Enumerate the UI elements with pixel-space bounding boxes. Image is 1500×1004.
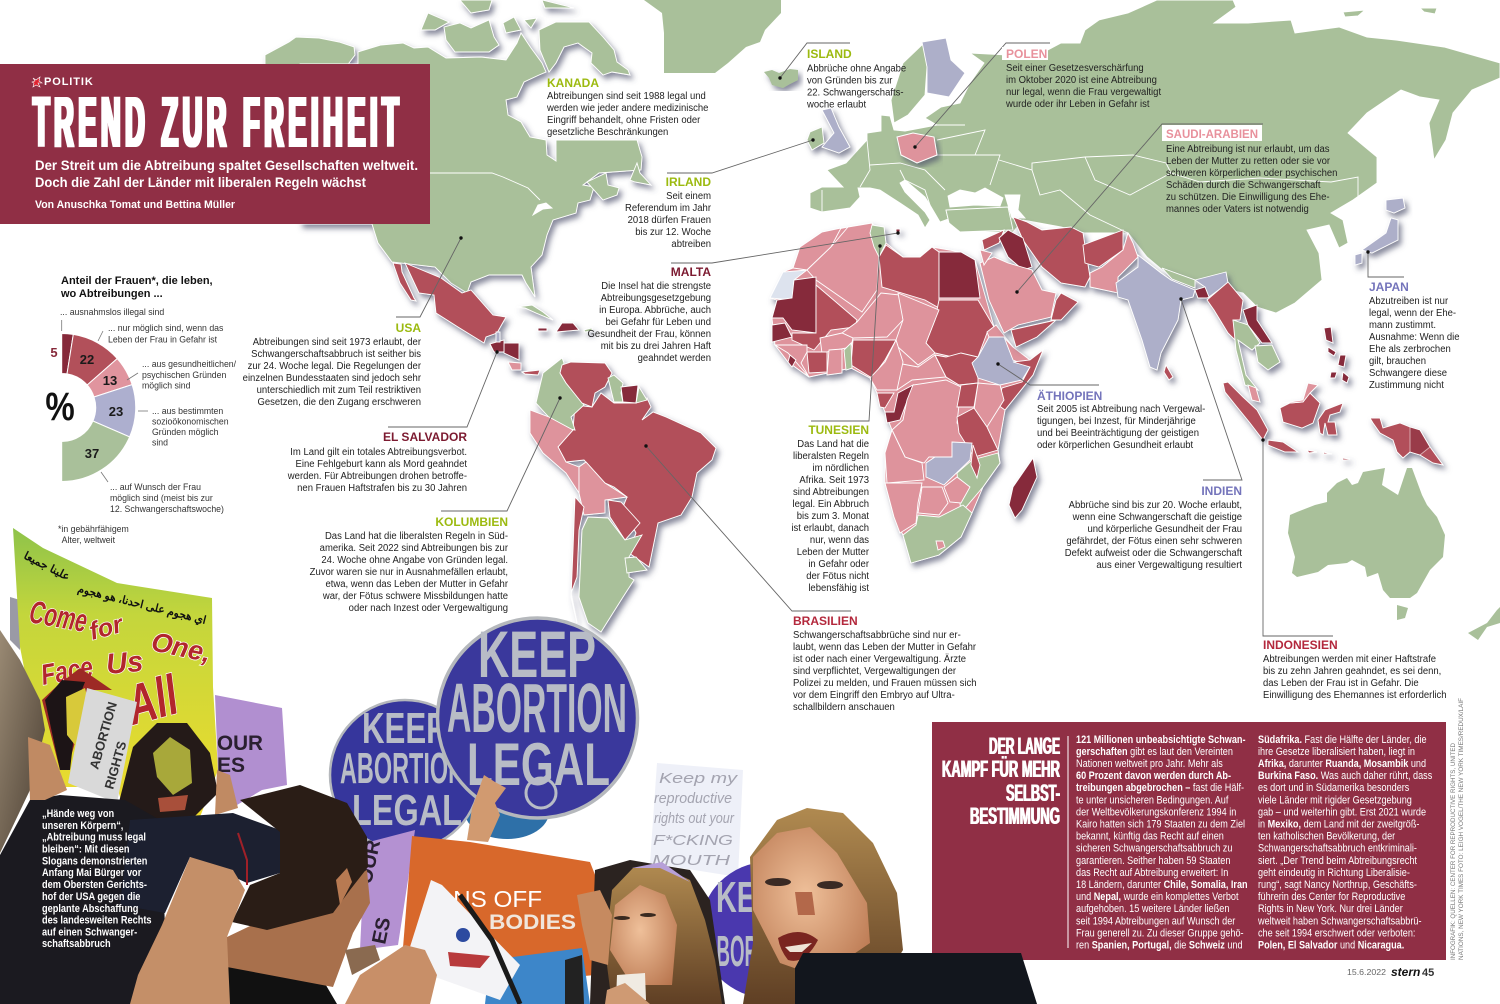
hand on poster bbox=[28, 737, 67, 800]
phone in foreground bbox=[795, 953, 1037, 1004]
column two: gab – und weiterhin gibt. Erst 2021 wurde bbox=[1258, 807, 1427, 819]
callout: Polen: Seit einer Gesetzesverschärfung bbox=[1006, 63, 1144, 74]
column one: und Nepal, wurde ein komplettes Verbot bbox=[1076, 891, 1239, 903]
column two: rung“, sagt Nancy Northrup, Geschäfts- bbox=[1258, 879, 1417, 891]
column one: aufgehoben. 15 weitere Länder ließen bbox=[1076, 903, 1229, 915]
column two: geht eindeutig in Richtung Liberalisie- bbox=[1258, 867, 1410, 879]
footnote: *in gebährfähigem bbox=[58, 524, 129, 534]
callout: Kolumbien: etwa, wenn das Leben der Mutter in Gefahr bbox=[325, 579, 509, 590]
column two: Rights in New York. Nur drei Länder bbox=[1258, 903, 1403, 915]
callout: El Salvador: nen Frauen Haftstrafen bis zu 30 Jahren bbox=[297, 483, 467, 494]
column one: te unter unsicheren Bedingungen. Auf bbox=[1076, 795, 1229, 807]
purple sign lower: OUR bbox=[354, 837, 385, 886]
poster: come for one: Face bbox=[39, 651, 95, 692]
source credit bbox=[1450, 698, 1465, 960]
sign: keep abortion legal small bbox=[330, 700, 480, 850]
subtitle bbox=[35, 157, 418, 190]
column one: Kairo hatten sich 179 Staaten zu dem Ziel bbox=[1076, 819, 1245, 831]
woman with microphone bbox=[577, 862, 722, 1004]
poster: come for one bbox=[10, 528, 218, 822]
callout: Indonesien bbox=[1263, 638, 1447, 701]
purple poster: ES bbox=[217, 754, 245, 777]
column two: siert. „Der Trend beim Abtreibungsrecht bbox=[1258, 855, 1417, 867]
chart title: wo Abtreibungen ... bbox=[60, 288, 163, 300]
map: Australia and Oceania bbox=[1288, 468, 1500, 640]
callout: Indien: aus einer Vergewaltigung resultiert bbox=[1096, 560, 1242, 571]
chart title: Anteil der Frauen*, die leben, bbox=[61, 275, 213, 287]
callout: Indonesien: bis zu zehn Jahren geahndet, es sei denn, bbox=[1263, 666, 1441, 677]
sign: keep abortion legal large: KEEP bbox=[478, 617, 596, 691]
callout: Kanada: Abtreibungen sind seit 1988 legal und bbox=[547, 91, 706, 102]
hand on orange sign bbox=[577, 890, 612, 965]
column one: bekannt, künftig das Recht auf einen bbox=[1076, 831, 1224, 843]
callout: Kolumbien: war, der Fötus schwere Missbildungen hatte bbox=[322, 591, 508, 602]
sign: right blue: ABOR bbox=[703, 927, 758, 976]
callout: Brasilien: Schwangerschaftsabbrüche sind nur er- bbox=[793, 630, 961, 641]
camera lens bbox=[120, 813, 280, 913]
callout: El Salvador: EL SALVADOR bbox=[383, 430, 467, 444]
crowd background bbox=[590, 860, 725, 1004]
donut values bbox=[50, 345, 123, 461]
chart: half donut share of women: möglich sind (meist bis zur bbox=[110, 493, 213, 503]
column one: garantieren. Seither haben 59 Staaten bbox=[1076, 855, 1230, 867]
callout: Kolumbien: KOLUMBIEN bbox=[435, 515, 508, 529]
callout: Indonesien: INDONESIEN bbox=[1263, 638, 1338, 652]
caption: schaftsabbruch bbox=[42, 938, 111, 950]
callout: Indien bbox=[1065, 484, 1242, 571]
chart: half donut share of women: ... aus gesundheitlichen/ bbox=[142, 359, 237, 369]
callout: Kanada bbox=[546, 76, 709, 138]
percent sign: % bbox=[45, 384, 75, 429]
sign: keep abortion legal large: ABORTION bbox=[447, 669, 627, 747]
column two: ihre Gesetze liberalisiert haben, liegt in bbox=[1258, 746, 1415, 758]
page footer: stern bbox=[1391, 965, 1420, 979]
column two: Afrika, darunter Ruanda, Mosambik und bbox=[1258, 758, 1426, 770]
poster: come for one: اي هجوم على احدنا، هو هجوم bbox=[76, 583, 207, 628]
callout: Brasilien: BRASILIEN bbox=[793, 614, 858, 628]
chart: half donut share of women: 12. Schwangerschaftswoche) bbox=[110, 504, 224, 514]
map: British Isles bbox=[807, 108, 850, 153]
footnote bbox=[58, 524, 129, 545]
sign: keep abortion legal small: ABORTION bbox=[340, 744, 465, 793]
callout: Kanada: Eingriff behandelt, ohne Fristen oder bbox=[547, 115, 701, 126]
purple sign lower bbox=[354, 830, 415, 950]
handwritten sign: Keep my bbox=[659, 770, 739, 787]
callout: Island: Abbrüche ohne Angabe bbox=[807, 63, 907, 75]
callout: Polen bbox=[1002, 47, 1161, 110]
donut values: 37 bbox=[85, 446, 99, 461]
handwritten sign: rights out your bbox=[654, 810, 735, 827]
donut values: 5 bbox=[50, 345, 58, 360]
callout: Kolumbien: Zuvor waren sie nur in Ausnahmefällen erlaubt, bbox=[310, 567, 508, 578]
poster: come for one: for bbox=[86, 610, 127, 646]
panel heading: SELBST- bbox=[1006, 780, 1060, 807]
callout: USA: zur 24. Woche legal. Die Regelungen der bbox=[248, 361, 422, 372]
callout: Tunesien: sind Abtreibungen bbox=[793, 487, 869, 498]
panel: der lange kampf bbox=[932, 722, 1446, 960]
column one: 121 Millionen unbeabsichtigte Schwan- bbox=[1076, 734, 1246, 746]
panel heading: KAMPF FÜR MEHR bbox=[942, 756, 1060, 783]
callout: Japan: mann zustimmt. bbox=[1369, 320, 1436, 331]
callout: Brasilien: sind verpflichtet, Vergewaltigungen der bbox=[793, 666, 957, 677]
chart: half donut share of women: ... nur möglich sind, wenn das bbox=[108, 323, 224, 333]
callout: Japan: Schwangere diese bbox=[1369, 368, 1447, 379]
megaphone bbox=[404, 880, 590, 1004]
callout: Malta: geahndet werden bbox=[638, 353, 711, 364]
callout: Kanada: gesetzliche Beschränkungen bbox=[547, 127, 668, 138]
callout: Malta: MALTA bbox=[671, 265, 711, 279]
small white sign bbox=[68, 688, 137, 803]
column two: weltweit haben Schwangerschaftsabbrü- bbox=[1257, 916, 1422, 928]
callout: USA: Schwangerschaftsabbruch ist seither bis bbox=[251, 349, 421, 360]
poster figure: dark-haired woman bbox=[117, 723, 218, 822]
handwritten sign: reproductive bbox=[654, 790, 732, 807]
callout: USA: einzelnen Bundesstaaten sind jedoch sehr bbox=[243, 373, 422, 384]
heading: TREND ZUR FREIHEIT bbox=[33, 83, 403, 162]
callout: Kanada: KANADA bbox=[547, 76, 599, 90]
panel: title bbox=[0, 64, 430, 224]
panel heading: BESTIMMUNG bbox=[970, 803, 1060, 830]
map: Poland bbox=[897, 133, 937, 163]
column one bbox=[1076, 734, 1248, 952]
callout: Irland: bis zur 12. Woche bbox=[635, 227, 711, 238]
caption: bleiben“: Mit diesen bbox=[42, 844, 130, 856]
callout: Japan: JAPAN bbox=[1369, 280, 1409, 294]
callout: Tunesien: bis zum 3. Monat bbox=[797, 511, 869, 522]
map: Japan bbox=[1355, 198, 1405, 265]
callout: Saudi-Arabien: schweren körperlichen oder psychischen bbox=[1166, 168, 1337, 179]
blue sign behind bbox=[465, 785, 549, 839]
callout: Äthiopien: und bei Beeinträchtigung der geistigen bbox=[1037, 428, 1199, 439]
callout: Tunesien: TUNESIEN bbox=[808, 423, 869, 437]
photo: protest collage bbox=[0, 528, 903, 1004]
callout: El Salvador: Eine Fehlgeburt kann als Mord geahndet bbox=[296, 459, 467, 470]
callout: Japan bbox=[1369, 280, 1460, 391]
column two: Südafrika. Fast die Hälfte der Länder, die bbox=[1258, 734, 1427, 746]
sign: keep abortion legal small: KEEP bbox=[362, 704, 447, 753]
callout: Island: woche erlaubt bbox=[806, 99, 866, 111]
world map bbox=[265, 0, 1500, 640]
callout: Tunesien: Leben der Mutter bbox=[797, 547, 870, 558]
raised hand bbox=[467, 775, 506, 842]
callout: Irland bbox=[625, 175, 712, 250]
handwritten sign bbox=[650, 763, 743, 877]
sign: keep abortion legal small: LEGAL bbox=[352, 786, 462, 835]
donut values: 13 bbox=[103, 373, 117, 388]
caption: auf einen Schwanger- bbox=[42, 927, 137, 939]
callout: Tunesien: in Gefahr oder bbox=[808, 559, 870, 570]
callout: Brasilien: vor dem Eingriff den Embryo auf Ultra- bbox=[793, 690, 955, 701]
chart: half donut share of women: ... aus bestimmten bbox=[152, 406, 223, 416]
panel heading bbox=[942, 733, 1060, 830]
chart: half donut share of women: möglich sind bbox=[142, 380, 190, 391]
column one: ren Spanien, Portugal, die Schweiz und bbox=[1076, 940, 1243, 952]
sign: hands off our bodies bbox=[402, 836, 597, 985]
callout: Irland: 2018 dürfen Frauen bbox=[628, 215, 711, 226]
poster: come for one: One, bbox=[149, 627, 214, 668]
column two: in Mexiko, dem Land mit der zweitgröß- bbox=[1258, 819, 1419, 831]
map: South Asia bbox=[1116, 255, 1228, 380]
callout: Japan: Zustimmung nicht bbox=[1369, 380, 1444, 391]
callout: Saudi-Arabien bbox=[1162, 125, 1337, 215]
callout: Island: 22. Schwangerschafts- bbox=[807, 87, 904, 99]
sign: keep abortion legal large bbox=[438, 617, 638, 818]
left dark jacket bbox=[0, 795, 165, 1004]
map: Greenland bbox=[644, 0, 781, 73]
column one: das Recht auf Abtreibung erweitert: In bbox=[1076, 867, 1228, 879]
callout: USA: unterschiedlich mit zum Teil restriktiven bbox=[257, 385, 421, 396]
callout: Saudi-Arabien: mannes oder Vaters ist notwendig bbox=[1166, 204, 1309, 215]
poster: come for one: Come bbox=[27, 593, 90, 639]
handwritten sign: F*CKING bbox=[653, 832, 733, 849]
map: Middle East bbox=[980, 217, 1138, 347]
callout: Brasilien bbox=[793, 614, 977, 713]
poster figure: hooded woman bbox=[42, 668, 112, 770]
callout: Malta: bei Gefahr für Leben und bbox=[605, 317, 711, 328]
callout: Indien: Defekt aufweist oder die Schwangerschaft bbox=[1065, 548, 1242, 559]
donut values: 23 bbox=[109, 404, 123, 419]
column one: 18 Ländern, darunter Chile, Somalia, Iran bbox=[1076, 879, 1248, 891]
column one: der Weltbevölkerungskonferenz 1994 in bbox=[1076, 807, 1236, 819]
caption: unseren Körpern“, bbox=[42, 820, 124, 832]
callout: Kolumbien: amerika. Seit 2022 sind Abtreibungen bis zur bbox=[320, 543, 509, 554]
chart: half donut share of women: ... auf Wunsch der Frau bbox=[110, 482, 201, 492]
column two: che seit 1994 erschwert oder verboten: bbox=[1258, 928, 1415, 940]
purple poster bbox=[215, 695, 287, 805]
callout: Malta: in Europa. Abbrüche, auch bbox=[599, 305, 711, 316]
column two: Schwangerschaftsabbruch entkriminali- bbox=[1258, 843, 1417, 855]
callout: Polen: nur legal, wenn die Frau vergewaltigt bbox=[1006, 87, 1161, 98]
subtitle: Der Streit um die Abtreibung spaltet Gesellschaften weltweit. bbox=[35, 157, 418, 173]
callout: Indien: wenn eine Schwangerschaft die geistige bbox=[1072, 512, 1242, 523]
poster: come for one: ABORTION bbox=[86, 700, 120, 771]
callout: Tunesien: ist erlaubt, danach bbox=[791, 523, 869, 534]
caption bbox=[42, 808, 152, 950]
caption: Anfang Mai Bürger vor bbox=[42, 867, 141, 879]
footnote: Alter, weltweit bbox=[62, 535, 115, 545]
photographer bbox=[130, 785, 370, 1004]
callout: Japan: legal, wenn der Ehe- bbox=[1369, 308, 1456, 319]
right woman bbox=[743, 808, 903, 1004]
callout: Tunesien: liberalsten Regeln bbox=[793, 451, 869, 462]
page footer: 15.6.2022 bbox=[1347, 967, 1386, 977]
callout: Indien: Abbrüche sind bis zur 20. Woche erlaubt, bbox=[1069, 500, 1242, 511]
handwritten sign: MOUTH bbox=[652, 852, 730, 869]
callout: El Salvador: Im Land gilt ein totales Abtreibungsverbot. bbox=[290, 447, 467, 458]
callout: Tunesien: im nördlichen bbox=[813, 463, 869, 474]
callout: Irland: abtreiben bbox=[671, 239, 711, 250]
column one: Frau generell zu. Zu dieser Gruppe gehö- bbox=[1076, 928, 1244, 940]
poster: come for one: Us bbox=[105, 646, 145, 681]
column one: treibungen abgebrochen – fast die Hälf- bbox=[1076, 782, 1244, 794]
callout: Kolumbien: Das Land hat die liberalsten Regeln in Süd- bbox=[325, 531, 508, 542]
callout: Saudi-Arabien: Eine Abtreibung ist nur erlaubt, um das bbox=[1166, 144, 1330, 155]
page footer: 45 bbox=[1422, 967, 1434, 979]
callout: Indonesien: Abtreibungen werden mit einer Haftstrafe bbox=[1263, 654, 1436, 665]
map: Africa bbox=[770, 223, 1043, 563]
callout: Polen: POLEN bbox=[1006, 47, 1047, 61]
column two: viele Länder mit rigider Gesetzgebung bbox=[1258, 795, 1412, 807]
callout: Äthiopien: Seit 2005 ist Abtreibung nach Vergewal- bbox=[1037, 404, 1205, 415]
poster: come for one: علينا جميعا bbox=[22, 550, 72, 583]
chart: half donut share of women: Leben der Frau in Gefahr ist bbox=[108, 334, 218, 345]
leader lines bbox=[388, 43, 1404, 636]
donut values: 22 bbox=[80, 352, 94, 367]
purple poster: OUR bbox=[217, 732, 263, 755]
source credit: NATIONS, NEW YORK TIMES FOTO: LEIGH VOGEL/THE NEW YORK TIMES/REDUX/LAIF bbox=[1458, 698, 1465, 960]
chart: half donut share of women: sind bbox=[152, 437, 168, 448]
callout: El Salvador bbox=[287, 430, 467, 494]
column two: ten katholischen Bevölkerung, der bbox=[1258, 831, 1396, 843]
callout: Kanada: werden wie jeder andere medizinische bbox=[546, 103, 709, 114]
callout: USA bbox=[243, 321, 422, 408]
callout: Malta: Gesundheit der Frau, können bbox=[588, 329, 711, 340]
callout: Indien: INDIEN bbox=[1201, 484, 1242, 498]
callout: Irland: IRLAND bbox=[666, 175, 711, 189]
callout: Kolumbien bbox=[310, 515, 509, 614]
callout: Tunesien bbox=[791, 423, 870, 594]
caption: „Abtreibung muss legal bbox=[42, 832, 146, 844]
callout: Tunesien: lebensfähig ist bbox=[808, 583, 869, 594]
sign: right blue bbox=[700, 862, 836, 998]
callout: Saudi-Arabien: Schäden durch die Schwangerschaft bbox=[1166, 180, 1321, 191]
callout: Irland: Seit einem bbox=[666, 191, 711, 202]
callout: Äthiopien: oder körperlichen Gesundheit erlaubt bbox=[1037, 440, 1193, 451]
donut segments bbox=[62, 333, 136, 482]
chart: half donut share of women: Gründen möglich bbox=[152, 427, 218, 437]
hands on megaphone bbox=[345, 945, 437, 1004]
callout: Indonesien: das Leben der Frau ist in Gefahr. Die bbox=[1263, 678, 1419, 689]
callout: Island: von Gründen bis zur bbox=[807, 75, 893, 87]
sign: hands off our bodies: BODIES bbox=[489, 911, 576, 934]
callout: Tunesien: der Fötus nicht bbox=[806, 571, 869, 582]
callout: Brasilien: ist oder nach einer Vergewaltigung. Ärzte bbox=[793, 653, 966, 665]
callout: Island bbox=[806, 47, 907, 111]
callout: Saudi-Arabien: SAUDI-ARABIEN bbox=[1166, 127, 1258, 141]
donut labels: ... ausnahmslos illegal sind bbox=[60, 307, 164, 317]
column one: gerschaften gibt es laut den Vereinten bbox=[1076, 746, 1233, 758]
purple sign lower: ES bbox=[368, 915, 395, 946]
left head hair bbox=[0, 630, 45, 853]
map: Iceland bbox=[764, 69, 798, 88]
column one: seit 1994 Abtreibungen auf Wunsch der bbox=[1076, 916, 1236, 928]
map: Southeast Asia bbox=[1207, 282, 1443, 465]
source credit: INFOGRAFIK: QUELLEN: CENTER FOR REPRODUCTIVE RIGHTS, UNITED bbox=[1450, 743, 1457, 960]
callout: USA: Gesetzen, die den Zugang erschweren bbox=[257, 397, 421, 408]
column two: führerin des Center for Reproductive bbox=[1258, 891, 1406, 903]
column two: Polen, El Salvador und Nicaragua. bbox=[1258, 940, 1405, 952]
callout: Brasilien: Polizei zu melden, und Frauen müssen sich bbox=[793, 678, 977, 689]
column one: Nationen weltweit pro Jahr. Mehr als bbox=[1076, 758, 1223, 770]
callout: Island: ISLAND bbox=[807, 47, 852, 61]
callout: Irland: Referendum im Jahr bbox=[625, 203, 712, 214]
caption: „Hände weg von bbox=[42, 808, 114, 820]
callout: Tunesien: legal. Ein Abbruch bbox=[792, 499, 869, 510]
callout: Malta: Abtreibungsgesetzgebung bbox=[601, 293, 711, 304]
caption: geplante Abschaffung bbox=[42, 903, 138, 915]
callout: Brasilien: schallbildern anschauen bbox=[793, 702, 895, 713]
column two bbox=[1257, 734, 1432, 952]
callout: Saudi-Arabien: zu schützen. Die Einwilligung des Ehe- bbox=[1166, 192, 1330, 203]
panel heading: DER LANGE bbox=[989, 733, 1060, 760]
callout: Polen: wurde oder ihr Leben in Gefahr ist bbox=[1005, 99, 1150, 110]
map: Eurasia bbox=[810, 0, 1500, 313]
poster: come for one: RIGHTS bbox=[101, 739, 130, 791]
callout: Indonesien: Einwilligung des Ehemannes ist erforderlich bbox=[1263, 690, 1447, 701]
icon: stern logo bbox=[32, 77, 42, 87]
map: South America bbox=[530, 358, 716, 632]
chart title bbox=[60, 275, 213, 300]
callout: Malta bbox=[588, 265, 711, 364]
callout: Saudi-Arabien: Leben der Mutter zu retten oder sie vor bbox=[1166, 156, 1331, 167]
callout: Malta: mit bis zu drei Jahren Haft bbox=[601, 341, 711, 352]
caption: hof der USA gegen die bbox=[42, 891, 141, 903]
sign: right blue: KE bbox=[716, 873, 756, 922]
caption: dem Obersten Gerichts- bbox=[42, 879, 147, 891]
callout: Japan: Ausnahme: Wenn die bbox=[1369, 332, 1460, 343]
page footer bbox=[1347, 965, 1434, 979]
chart: half donut share of women: psychischen Gründen bbox=[142, 370, 226, 380]
callout: Indien: gefährdet, der Fötus einen sehr schweren bbox=[1066, 536, 1242, 547]
column two: es dort und in Südamerika besonders bbox=[1258, 782, 1409, 794]
callout: Japan: gilt, brauchen bbox=[1369, 356, 1426, 367]
callout: Japan: Abzutreiben ist nur bbox=[1369, 296, 1449, 307]
callout: USA: Abtreibungen sind seit 1973 erlaubt, der bbox=[253, 337, 422, 348]
callout: Brasilien: laubt, wenn das Leben der Mutter in Gefahr bbox=[793, 642, 977, 653]
column two: Burkina Faso. Was auch daher rührt, dass bbox=[1258, 770, 1432, 782]
byline: Von Anuschka Tomat und Bettina Müller bbox=[35, 199, 236, 211]
caption: des landesweiten Rechts bbox=[42, 915, 152, 927]
column one: 60 Prozent davon werden durch Ab- bbox=[1076, 770, 1231, 782]
callout: Tunesien: nur, wenn das bbox=[810, 535, 869, 546]
poster: come for one: All bbox=[118, 663, 185, 737]
callout: Polen: im Oktober 2020 ist eine Abtreibung bbox=[1006, 75, 1157, 86]
chart: half donut share of women bbox=[45, 275, 237, 545]
map: North America bbox=[265, 0, 651, 320]
column one: sicheren Schwangerschaftsabbruch zu bbox=[1076, 843, 1232, 855]
callout: Äthiopien: ÄTHIOPIEN bbox=[1037, 388, 1102, 403]
sign: keep abortion legal large: LEGAL bbox=[467, 731, 610, 798]
callout: Japan: Ehe als zerbrochen bbox=[1369, 344, 1451, 355]
chart: half donut share of women: sozioökonomischen bbox=[152, 416, 229, 427]
callout: Indien: und körperliche Gesundheit der Frau bbox=[1087, 524, 1242, 535]
subtitle: Doch die Zahl der Länder mit liberalen Regeln wächst bbox=[35, 174, 366, 190]
callout: Malta: Die Insel hat die strengste bbox=[601, 281, 711, 292]
callout: Äthiopien: tigungen, bei Inzest, für Minderjährige bbox=[1037, 416, 1196, 427]
callout: Tunesien: Das Land hat die bbox=[797, 439, 869, 450]
callout: Tunesien: Afrika. Seit 1973 bbox=[799, 475, 869, 486]
callout: Kolumbien: 24. Woche ohne Angabe von Gründen legal. bbox=[321, 555, 508, 566]
callout: Äthiopien bbox=[1037, 388, 1205, 451]
caption: Slogans demonstrierten bbox=[42, 856, 147, 868]
callout: USA: USA bbox=[396, 321, 421, 335]
callout: El Salvador: werden. Für Abtreibungen drohen betroffe- bbox=[287, 471, 467, 482]
callout: Kolumbien: oder nach Inzest oder Vergewaltigung bbox=[349, 603, 508, 614]
section label: POLITIK bbox=[44, 76, 94, 88]
map: Mexico and Central America bbox=[393, 263, 592, 375]
sign: hands off our bodies: ANS OFF bbox=[437, 886, 542, 912]
